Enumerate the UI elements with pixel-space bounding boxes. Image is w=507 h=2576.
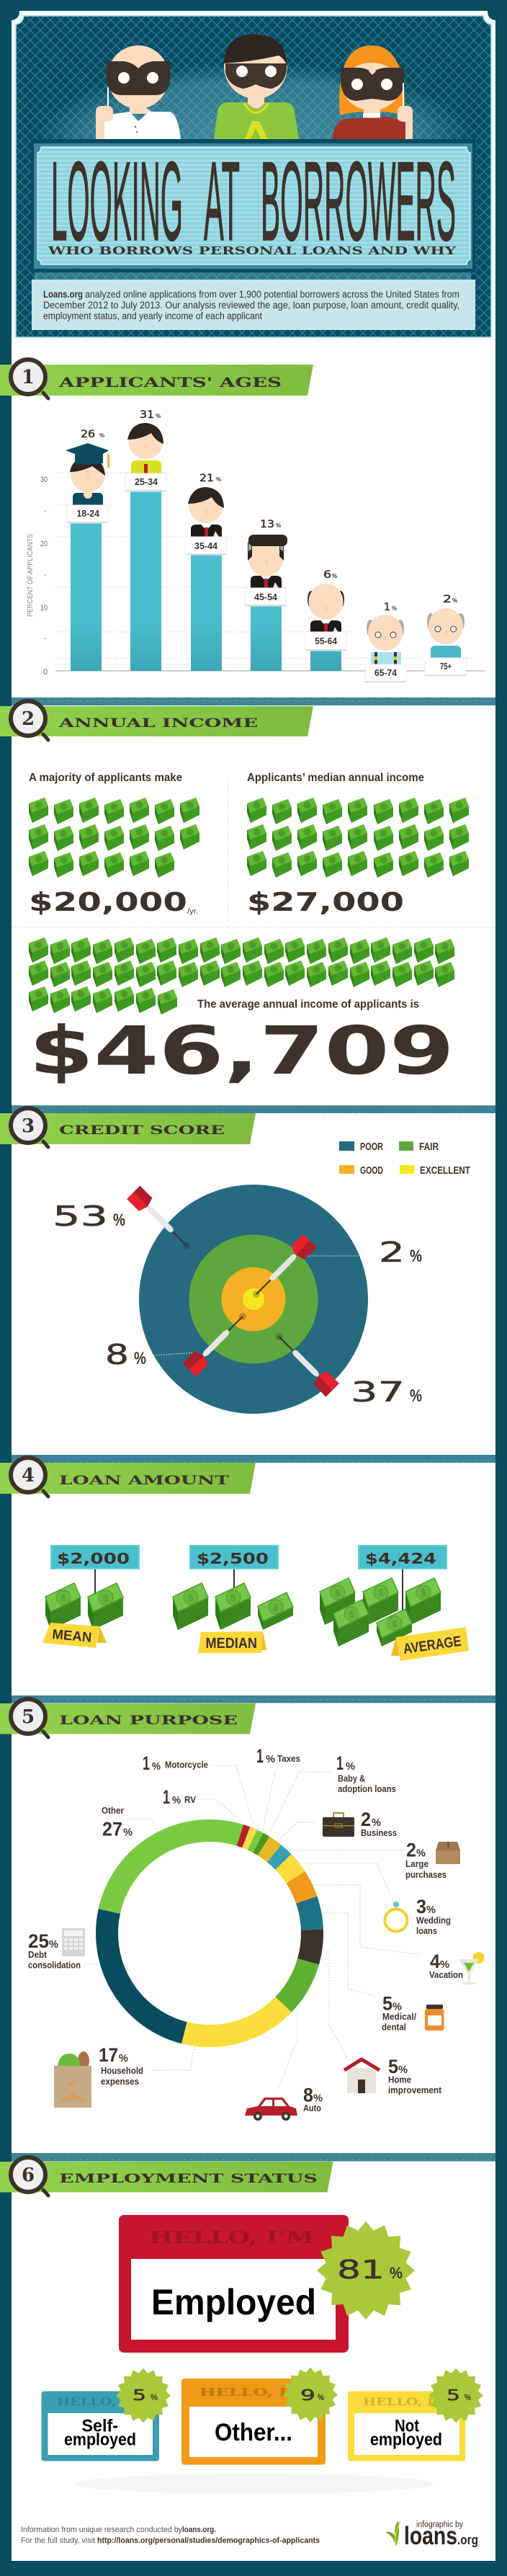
percent: 2 [443,594,452,605]
percent: 26 [81,429,95,440]
age card: 65-74 [374,667,398,678]
y axis: - [44,507,47,515]
icon: calculator [62,1928,85,1956]
majority income block: /yr. [187,908,198,916]
person: 18-24 graduate [66,429,109,523]
badge: self-employed: % [151,2392,158,2402]
footer source text: http://loans.org/personal/studies/demographics-of-applicants [97,2536,320,2545]
label: wedding loans: loans [416,1925,437,1936]
figure: bald man with mask [96,45,181,139]
majority income block: $20,000 [29,888,187,917]
label: home improvement: % [398,2064,408,2076]
icon: grocery bag [54,2051,91,2108]
dart: good [183,1307,252,1376]
label: taxes: 1 [256,1745,264,1767]
label: medical: dental [382,2022,406,2033]
legend: EXCELLENT [420,1164,470,1177]
badge: employed [119,2215,415,2353]
percent: 21 [199,473,214,484]
median income block: $27,000 [247,888,404,917]
label: motorcycle: % [152,1760,161,1773]
percent: % [452,597,457,604]
section 5: loan purpose [0,1699,484,2121]
money icons: majority [29,798,199,878]
figure: masked man in green [214,34,299,139]
banner: section 2 heading: ANNUAL INCOME [58,716,258,731]
person: 75+ [425,594,466,676]
label: motorcycle: Motorcycle [165,1760,208,1770]
footer source text: loans.org. [182,2526,216,2534]
bars [71,491,341,671]
label: household expenses: % [119,2052,128,2064]
2 percent: 2 [379,1236,405,1268]
y axis: 0 [43,668,48,677]
header panel [12,11,495,337]
label: other [102,1805,133,1840]
mean loan [42,1546,139,1648]
label: home improvement [344,2056,442,2095]
2 percent: % [410,1247,422,1266]
label: debt consolidation [28,1928,85,1970]
median loan: $2,500 [197,1550,269,1567]
label: taxes [256,1745,300,1767]
intro text box: December 2012 to July 2013. Our analysis reviewed the age, loan purpose, loan amount, credit quality, [43,300,459,311]
percent: % [156,413,161,419]
age card: 35-44 [194,540,218,551]
badge: self-employed: employed [64,2430,136,2450]
banner: section 4 heading: 4 [22,1465,35,1487]
label: business: 2 [361,1809,371,1830]
label: household expenses: Household [101,2065,143,2076]
median loan [173,1546,293,1653]
badge: employed: 81 [337,2255,385,2285]
label: medical [382,1993,444,2033]
label: home improvement: improvement [388,2085,442,2095]
label: wedding loans [385,1896,451,1936]
footer source text [21,2526,320,2545]
53 percent: % [113,1211,125,1230]
badge: employed: HELLO, I'M [149,2228,314,2247]
banner: section 1 heading: 1 [22,367,35,388]
badge: self-employed: Self- [82,2417,118,2436]
section 1: applicants' ages [0,360,485,682]
section 2: annual income [0,701,495,1089]
dart: excellent [247,1234,316,1303]
label: auto: 8 [303,2084,313,2105]
label: motorcycle [143,1752,208,1774]
logo: loans.org [385,2521,478,2550]
age card: 18-24 [76,508,100,519]
badge: other: Other... [215,2419,292,2446]
title plate [31,139,475,272]
legend: FAIR [419,1141,439,1153]
percent [140,409,161,421]
banner: section 3 heading: CREDIT SCORE [59,1123,225,1138]
logo: loans.org: infographic by [416,2521,463,2529]
label: auto: % [313,2093,323,2104]
label: other: % [123,1826,133,1839]
person: 45-54 [245,519,287,606]
label: auto: Auto [303,2103,321,2113]
label: RV: % [172,1794,181,1806]
y axis: 30 [40,476,48,484]
banner: section 4 heading [0,1458,256,1497]
average income block: The average annual income of applicants is [197,999,419,1010]
label: other: Other [102,1805,124,1816]
y axis: 10 [40,604,48,612]
percent: 1 [384,602,390,613]
bar chart: age groups [26,409,485,682]
label: motorcycle: 1 [143,1752,150,1774]
percent: % [392,605,397,612]
label: RV: 1 [163,1786,170,1808]
percent: 13 [260,519,274,530]
banner: section 6 heading: 6 [22,2165,35,2186]
label: taxes: % [266,1753,275,1765]
dart: poor [127,1186,196,1255]
age card: 45-54 [254,592,278,602]
37 percent: 37 [351,1376,405,1408]
mean loan: $2,000 [57,1550,130,1567]
label: other: 27 [102,1819,122,1840]
person: 35-44 [185,473,226,555]
badge: not employed: % [465,2392,471,2402]
section 3: credit score [0,1108,470,1414]
badge: self-employed [42,2368,171,2461]
label: medical: 5 [382,1993,392,2015]
label: vacation: 4 [430,1951,440,1972]
percent [81,429,104,440]
section 6: employment status [0,2157,483,2494]
intro text box [32,280,475,330]
label: home improvement: Home [388,2074,411,2085]
average loan: AVERAGE [403,1634,462,1657]
label: household expenses [54,2044,143,2108]
leader lines [85,1765,421,2090]
label: RV [163,1786,196,1808]
banner: section 5 heading: LOAN PURPOSE [59,1713,238,1728]
icon: house [344,2059,380,2093]
footer source text: For the full study, visit [21,2536,95,2545]
label: business: % [372,1817,381,1829]
percent [384,602,397,613]
label: large purchases: purchases [405,1869,447,1880]
53 percent [53,1200,125,1232]
banner: section 3 heading: 3 [22,1115,35,1137]
label: debt consolidation: consolidation [28,1960,81,1970]
money icons: median [247,798,469,878]
badge: employed: % [390,2264,403,2282]
label: baby and adoption: 1 [336,1752,344,1774]
legend: POOR [360,1141,383,1153]
percent: % [99,432,104,439]
banner: section 6 heading: EMPLOYMENT STATUS [59,2172,318,2186]
banner: section 1 heading: APPLICANTS' AGES [58,375,282,391]
badge: not employed: employed [370,2430,442,2450]
icon: jar [425,2005,444,2031]
badge: not employed: HELLO, I'M [363,2397,453,2408]
section 4: loan amount [0,1458,469,1661]
badge: other: HELLO, I'M [199,2386,311,2399]
percent: 6 [323,569,331,581]
subtitle: WHO BORROWS PERSONAL LOANS AND WHY [48,245,457,257]
badge: self-employed: HELLO, I'M [57,2397,147,2408]
intro text box: analyzed online applications from over 1,900 potential borrowers across the United States from [85,289,459,300]
percent [323,569,337,581]
label: debt consolidation: Debt [28,1949,48,1960]
label: business [323,1809,397,1838]
label: medical: % [392,2000,402,2013]
label: auto [245,2084,323,2121]
badge: not employed: 5 [447,2386,460,2404]
37 percent: % [410,1386,422,1406]
median loan: MEDIAN [206,1636,257,1652]
8 percent: % [134,1349,146,1368]
age card: 75+ [440,661,452,672]
footer source text: Information from unique research conducted by [21,2526,182,2534]
average income block [29,937,454,1089]
banner: section 2 heading [0,701,313,740]
person: 25-34 [125,409,166,491]
percent: % [276,522,281,529]
title text: AT [204,139,240,264]
badge: not employed: Not [395,2417,419,2436]
y axis: PERCENT OF APPLICANTS [26,534,35,617]
label: baby and adoption: % [346,1760,355,1773]
donut chart [65,1788,354,2078]
label: RV: RV [184,1794,196,1805]
icon: car [245,2098,297,2121]
y axis: 20 [40,540,48,548]
banner: section 5 heading: 5 [22,1706,35,1728]
y axis: - [44,634,47,643]
majority income block: A majority of applicants make [29,772,182,784]
banner: section 4 heading: LOAN AMOUNT [59,1474,230,1488]
label: business: Business [361,1827,397,1838]
average loan [320,1546,469,1661]
badge: employed: Employed [151,2282,316,2322]
label: large purchases: Large [405,1858,429,1869]
icon: martini [459,1952,484,1984]
badge: other: 9 [300,2386,315,2404]
percent [260,519,281,530]
legend [339,1141,470,1177]
y axis [26,476,48,677]
percent [443,594,457,605]
8 percent: 8 [105,1339,129,1371]
label: taxes: Taxes [277,1753,300,1764]
label: large purchases: 2 [406,1839,416,1860]
dart: fair [270,1327,339,1396]
2 percent [379,1236,422,1268]
8 percent [105,1339,146,1371]
label: wedding loans: 3 [416,1896,426,1917]
figure: masked woman with orange hair [333,45,413,139]
person: 55-64 [305,569,346,651]
percent: % [216,476,221,483]
age card: 55-64 [315,636,338,646]
label: medical: Medical/ [382,2011,416,2022]
mean loan: MEAN [52,1627,92,1646]
label: baby and adoption: adoption loans [338,1783,396,1794]
percent [199,473,221,484]
label: debt consolidation: 25 [28,1930,49,1952]
label: household expenses: 17 [99,2044,118,2066]
label: vacation: Vacation [429,1969,463,1980]
label: vacation [429,1951,484,1984]
age card: 25-34 [135,476,158,487]
average income block: $46,709 [29,1012,454,1089]
label: wedding loans: % [426,1904,436,1916]
logo: loans.org: loans [404,2522,457,2550]
banner: section 3 heading [0,1108,256,1147]
badge: other [181,2368,338,2464]
53 percent: 53 [53,1200,108,1232]
icon: briefcase [323,1813,354,1837]
percent: 31 [140,409,154,421]
label: vacation: % [440,1958,449,1971]
person: 65-74 [365,602,406,682]
label: baby and adoption [336,1752,396,1794]
badge: not employed [348,2368,483,2461]
badge: other: % [318,2392,324,2402]
banner: section 5 heading [0,1699,256,1737]
banner: section 1 heading [0,360,313,398]
intro text box: Loans.org [43,289,83,300]
37 percent [351,1376,422,1408]
label: household expenses: expenses [101,2076,139,2087]
label: baby and adoption: Baby & [338,1773,365,1784]
majority income block [29,772,199,917]
median income block [247,772,469,917]
label: debt consolidation: % [49,1938,58,1951]
label: large purchases: % [416,1848,426,1859]
average loan: $4,424 [365,1550,436,1567]
legend: GOOD [360,1164,383,1177]
y axis: - [44,571,47,579]
icon: ring [385,1902,408,1931]
intro text box: employment status, and yearly income of each applicant [43,311,262,321]
money icons: average [29,937,454,1015]
percent: % [332,573,337,579]
icon: box [436,1842,460,1864]
median income block: Applicants’ median annual income [247,772,424,784]
label: large purchases [405,1839,460,1880]
label: home improvement: 5 [388,2056,398,2077]
banner: section 6 heading [0,2157,333,2196]
banner: section 2 heading: 2 [22,708,35,730]
logo: loans.org: .org [457,2533,478,2547]
badge: self-employed: 5 [133,2386,146,2404]
dartboard chart [127,1185,368,1414]
label: wedding loans: Wedding [416,1915,451,1925]
